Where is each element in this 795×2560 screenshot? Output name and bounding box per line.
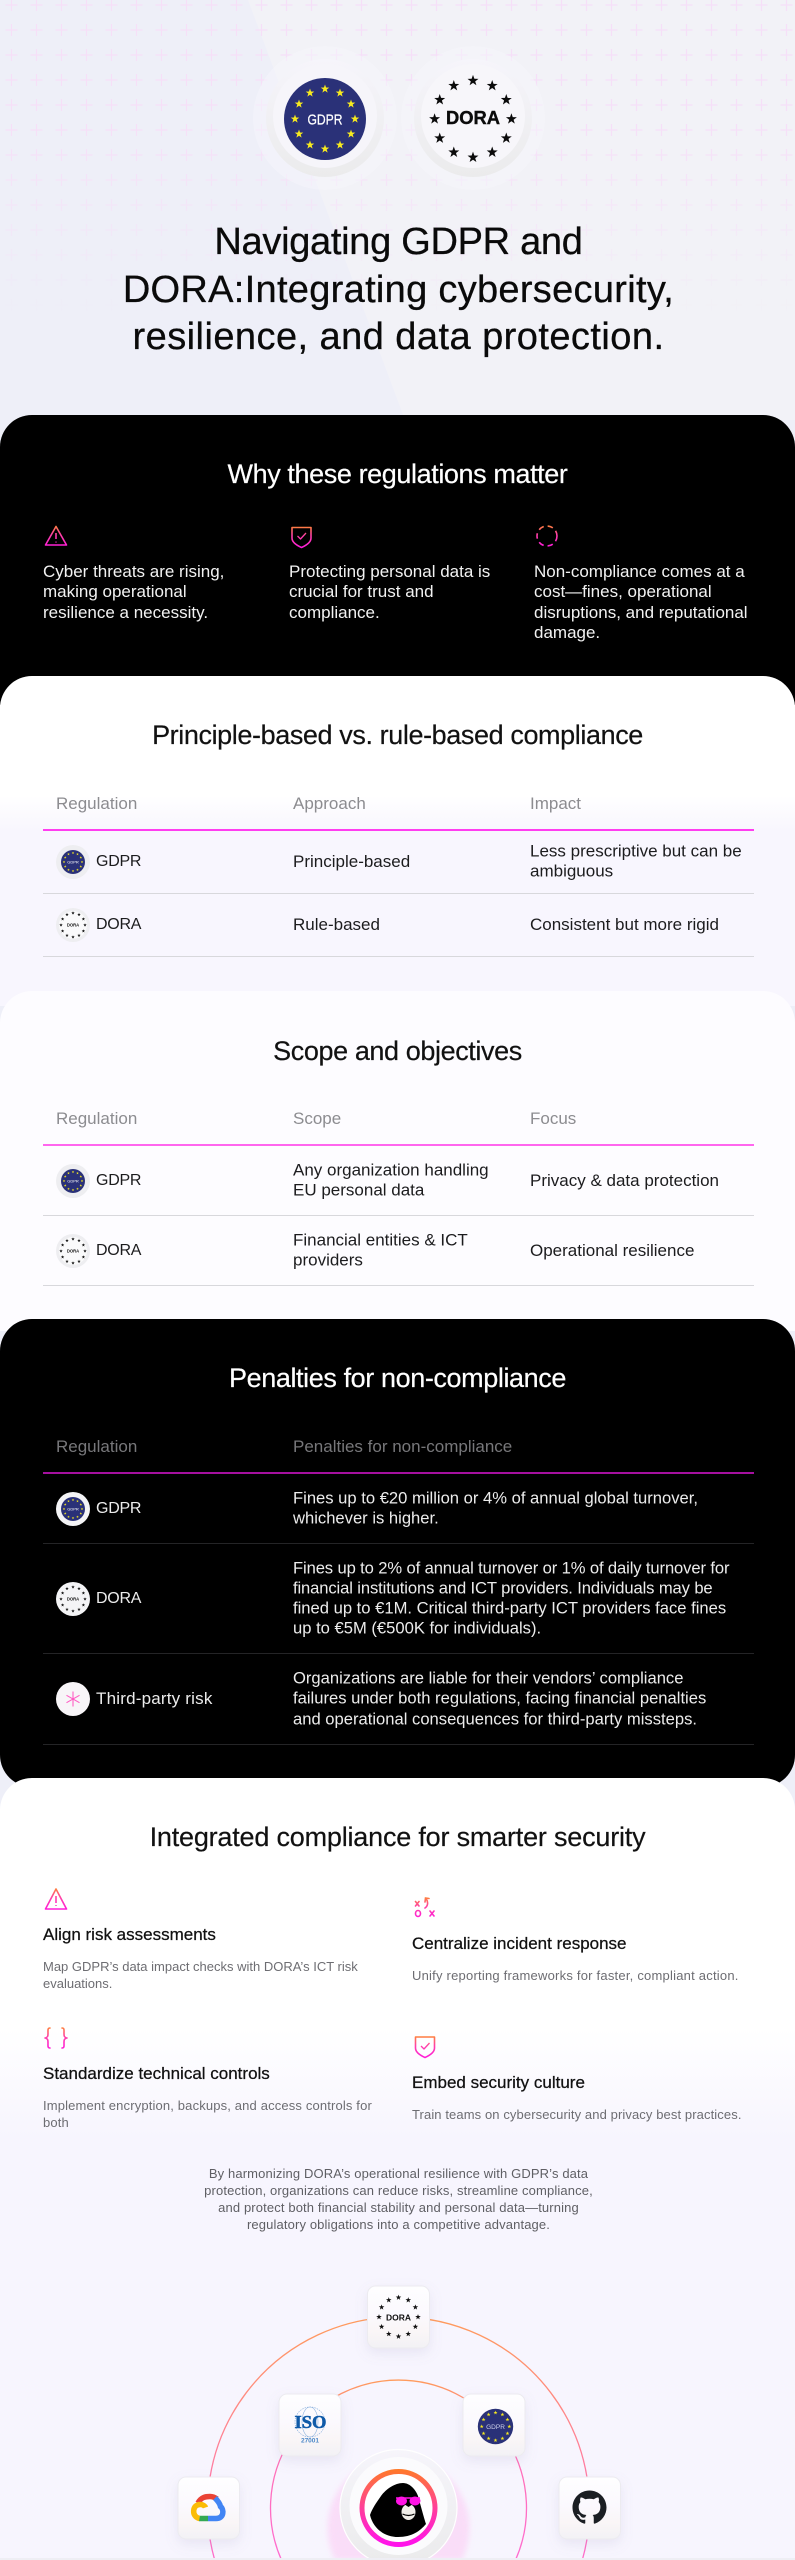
icon: DORA logo: DORA	[67, 1596, 79, 1601]
item: embed security culture	[412, 2036, 742, 2122]
row: GDPR: Any organization handling	[293, 1160, 489, 1179]
row: GDPR: whichever is higher.	[293, 1508, 439, 1528]
card: DORA: DORA	[386, 2312, 411, 2322]
closing paragraph: regulatory obligations into a competitive advantage.	[247, 2216, 550, 2232]
card: cyber threats	[43, 526, 224, 622]
icon: GDPR badge: GDPR	[308, 112, 343, 128]
row: DORA: financial institutions and ICT providers. Individuals may be	[293, 1578, 713, 1597]
table header: Scope	[293, 1109, 341, 1128]
panel: principle-based vs rule-based	[0, 676, 795, 1006]
item description	[43, 2098, 372, 2130]
icon: shield check	[291, 526, 312, 548]
row: GDPR: ambiguous	[530, 862, 613, 880]
icon: DORA logo	[56, 908, 90, 942]
item description: both	[43, 2114, 69, 2130]
text	[43, 562, 224, 622]
text	[534, 562, 748, 642]
table header	[56, 1437, 512, 1456]
icon: asterisk	[56, 1682, 90, 1716]
table header: Approach	[293, 794, 366, 813]
text: making operational	[43, 582, 187, 601]
table header: Penalties for non-compliance	[293, 1437, 512, 1456]
row: GDPR	[43, 1146, 754, 1216]
logo: central gorilla badge	[327, 2450, 470, 2560]
icon: GDPR badge	[253, 46, 397, 190]
table: penalties	[43, 1437, 754, 1745]
table header: Regulation	[56, 1109, 137, 1128]
item: standardize technical controls	[43, 2027, 372, 2130]
row: third-party risk: and operational consequences for third-party missteps.	[293, 1709, 697, 1728]
icon: DORA logo	[56, 1234, 90, 1268]
row: GDPR: Privacy & data protection	[530, 1170, 719, 1189]
hero background with plus pattern	[6, 0, 792, 211]
icon: warning triangle	[44, 526, 68, 546]
icon: braces	[44, 2027, 68, 2049]
panel: integrated compliance	[0, 1778, 795, 2560]
row: DORA	[43, 1544, 754, 1654]
table header	[56, 794, 581, 813]
item title: Centralize incident response	[412, 1934, 627, 1953]
card: GitHub	[559, 2477, 620, 2539]
item: align risk assessments	[42, 1888, 358, 1990]
table: scope	[43, 1109, 754, 1286]
title	[123, 221, 674, 358]
panel: penalties for non-compliance	[0, 1319, 795, 1787]
text: Protecting personal data is	[289, 562, 490, 581]
item description: Unify reporting frameworks for faster, compliant action.	[412, 1968, 739, 1982]
item title: Embed security culture	[412, 2073, 585, 2092]
closing paragraph: and protect both financial stability and personal data—turning	[218, 2200, 579, 2214]
item: centralize incident response	[412, 1897, 739, 1982]
text: disruptions, and reputational	[534, 603, 748, 622]
card: ISO 27001: 27001	[301, 2438, 319, 2444]
row: DORA: providers	[293, 1250, 363, 1270]
card: DORA	[368, 2286, 430, 2348]
row: GDPR: Principle-based	[293, 851, 410, 870]
heading: Penalties for non-compliance	[229, 1363, 566, 1393]
text: Non-compliance comes at a	[534, 562, 745, 581]
card: ISO 27001: ISO	[294, 2412, 326, 2432]
table header: Regulation	[56, 794, 137, 813]
icon: DORA logo: DORA	[67, 1248, 79, 1253]
closing paragraph: By harmonizing DORA’s operational resilience with GDPR’s data	[209, 2166, 588, 2180]
card: GDPR	[463, 2394, 525, 2456]
row: DORA: Financial entities & ICT	[293, 1230, 468, 1249]
item title: Standardize technical controls	[43, 2064, 270, 2083]
row: GDPR: GDPR	[96, 852, 141, 869]
item description: Train teams on cybersecurity and privacy best practices.	[412, 2106, 742, 2122]
row: DORA: Consistent but more rigid	[530, 915, 719, 934]
text: resilience a necessity.	[43, 603, 208, 622]
row: GDPR	[43, 830, 754, 894]
title: Navigating GDPR and	[214, 221, 583, 263]
title: resilience, and data protection.	[133, 316, 664, 358]
card: personal data	[289, 526, 490, 622]
row: DORA: Operational resilience	[530, 1240, 694, 1259]
row: DORA	[43, 894, 754, 957]
table header: Focus	[530, 1109, 576, 1128]
row: GDPR: EU personal data	[293, 1180, 424, 1200]
icon: dashed circle	[536, 525, 558, 547]
row: GDPR: Fines up to €20 million or 4% of annual global turnover,	[293, 1488, 698, 1507]
row: third-party risk: failures under both regulations, facing financial penalties	[293, 1689, 706, 1708]
icon: DORA badge	[401, 46, 545, 190]
hero logos: GDPR and DORA badges	[256, 49, 542, 186]
orbit rings	[207, 2317, 589, 2560]
row: DORA: Fines up to 2% of annual turnover or 1% of daily turnover for	[293, 1558, 729, 1577]
row: third-party risk	[43, 1654, 754, 1745]
text: compliance.	[289, 603, 380, 622]
row: GDPR: GDPR	[96, 1499, 141, 1516]
row: GDPR: GDPR	[96, 1171, 141, 1188]
icon: DORA logo	[56, 1582, 90, 1616]
panel: scope and objectives	[0, 991, 795, 1331]
table header: Impact	[530, 794, 581, 813]
row: DORA: up to €5M (€500K for individuals).	[293, 1619, 541, 1638]
icon: GDPR logo: GDPR	[67, 859, 79, 864]
card: Google Cloud	[178, 2477, 240, 2539]
text: cost—fines, operational	[534, 582, 712, 601]
row: DORA: DORA	[96, 1589, 141, 1606]
text: Cyber threats are rising,	[43, 562, 224, 581]
item title: Align risk assessments	[43, 1925, 216, 1944]
item description	[43, 1958, 358, 1990]
text	[289, 562, 490, 622]
row: DORA: DORA	[96, 916, 141, 933]
icon: warning triangle	[44, 1888, 68, 1910]
item description: Implement encryption, backups, and access controls for	[43, 2098, 372, 2112]
icon: GDPR logo	[56, 845, 90, 879]
heading: Scope and objectives	[273, 1036, 522, 1066]
closing paragraph: protection, organizations can reduce risks, streamline compliance,	[204, 2182, 593, 2198]
icon: DORA badge: DORA	[446, 108, 500, 128]
row: DORA: fined up to €1M. Critical third-party ICT providers face fines	[293, 1598, 726, 1618]
icon: GDPR logo: GDPR	[67, 1178, 79, 1183]
icon: shield check	[414, 2036, 436, 2058]
closing paragraph	[204, 2166, 593, 2232]
heading: Integrated compliance for smarter security	[150, 1822, 645, 1852]
item description: Map GDPR’s data impact checks with DORA’s ICT risk	[43, 1958, 358, 1974]
panel: why these regulations matter	[0, 415, 795, 705]
heading: Principle-based vs. rule-based compliance	[152, 720, 643, 750]
row: GDPR	[43, 1474, 754, 1544]
card: non-compliance cost	[534, 525, 748, 642]
title: DORA:Integrating cybersecurity,	[123, 268, 674, 310]
row: GDPR: Less prescriptive but can be	[530, 841, 742, 860]
icon: DORA logo: DORA	[67, 922, 79, 927]
icon: GDPR logo	[56, 1492, 90, 1526]
card: ISO 27001	[279, 2394, 341, 2456]
row: DORA	[43, 1216, 754, 1286]
table: compliance approach	[43, 794, 754, 957]
table header: Regulation	[56, 1437, 137, 1456]
text: damage.	[534, 623, 600, 642]
icon: GDPR logo	[56, 1164, 90, 1198]
card: GDPR: GDPR	[486, 2424, 505, 2431]
row: third-party risk: Organizations are liable for their vendors’ compliance	[293, 1669, 683, 1688]
heading: Why these regulations matter	[228, 459, 567, 489]
row: DORA: Rule-based	[293, 915, 380, 934]
icon: play diagram	[414, 1897, 435, 1918]
diagram: orbit of frameworks	[178, 2286, 621, 2558]
item description: evaluations.	[43, 1976, 112, 1990]
row: third-party risk: Third-party risk	[96, 1689, 213, 1708]
row: DORA: DORA	[96, 1241, 141, 1258]
icon: GDPR logo: GDPR	[67, 1506, 79, 1511]
text: crucial for trust and	[289, 582, 434, 601]
table header	[56, 1109, 576, 1128]
